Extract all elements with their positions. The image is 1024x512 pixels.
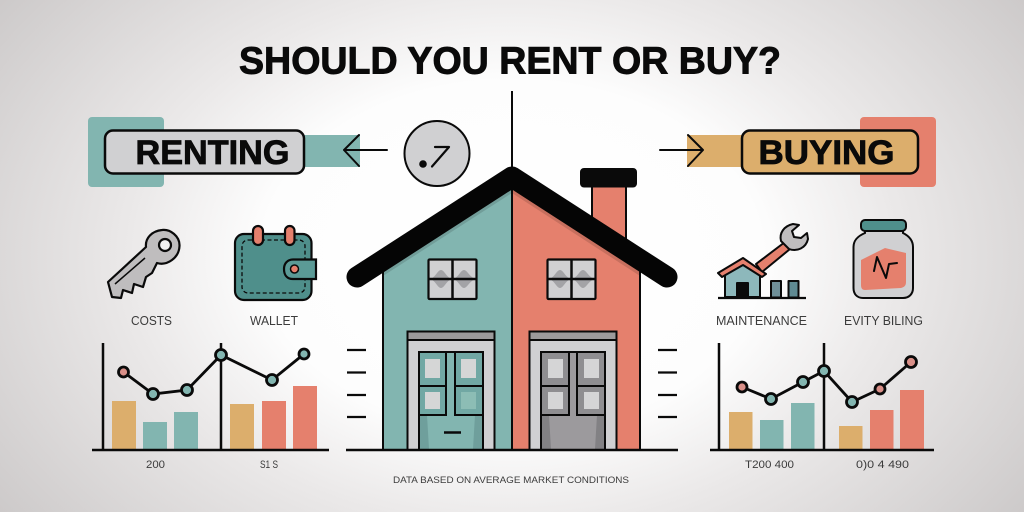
house outline <box>383 91 640 450</box>
ground line <box>346 449 678 451</box>
arrow: toward renting <box>344 135 387 166</box>
right window <box>548 260 596 299</box>
icon: maintenance house and wrench <box>718 224 808 298</box>
icon: central house <box>346 91 678 450</box>
left house half <box>383 185 512 450</box>
left window <box>428 260 476 299</box>
right tick marks <box>658 350 677 417</box>
chart: renting <box>92 343 329 471</box>
icon: equity jar <box>854 220 913 298</box>
chimney <box>580 168 637 250</box>
panel: buying header: BUYING <box>758 134 894 172</box>
axis label: T200 400 <box>745 459 794 471</box>
left tick marks <box>347 350 366 417</box>
bars <box>729 390 924 450</box>
panel: renting header: RENTING <box>136 134 290 172</box>
axis label: 0)0 4 490 <box>856 459 909 471</box>
icon: key <box>108 230 180 298</box>
label: equity building: EVITY BILING <box>844 314 923 328</box>
icon: wallet <box>235 226 316 300</box>
axis label: S1 S <box>260 459 278 471</box>
axis label: 200 <box>146 459 165 471</box>
footnote: DATA BASED ON AVERAGE MARKET CONDITIONS <box>393 475 629 486</box>
left door <box>408 332 494 450</box>
right house half <box>512 185 640 450</box>
trend line <box>737 356 916 408</box>
icon: clock badge <box>404 121 470 186</box>
axes <box>92 343 329 450</box>
axes <box>710 343 934 450</box>
panel: buying header <box>687 117 936 187</box>
title: SHOULD YOU RENT OR BUY? <box>239 40 781 82</box>
arrow: toward buying <box>660 135 703 166</box>
label: costs: COSTS <box>131 314 172 328</box>
roof <box>357 177 667 277</box>
bars <box>112 386 317 450</box>
label: wallet: WALLET <box>250 314 298 328</box>
roof shadow <box>383 190 640 273</box>
label: maintenance: MAINTENANCE <box>716 314 807 328</box>
trend line <box>118 349 309 400</box>
right door <box>530 332 616 450</box>
panel: renting header <box>88 117 360 187</box>
chart: buying <box>710 343 934 471</box>
